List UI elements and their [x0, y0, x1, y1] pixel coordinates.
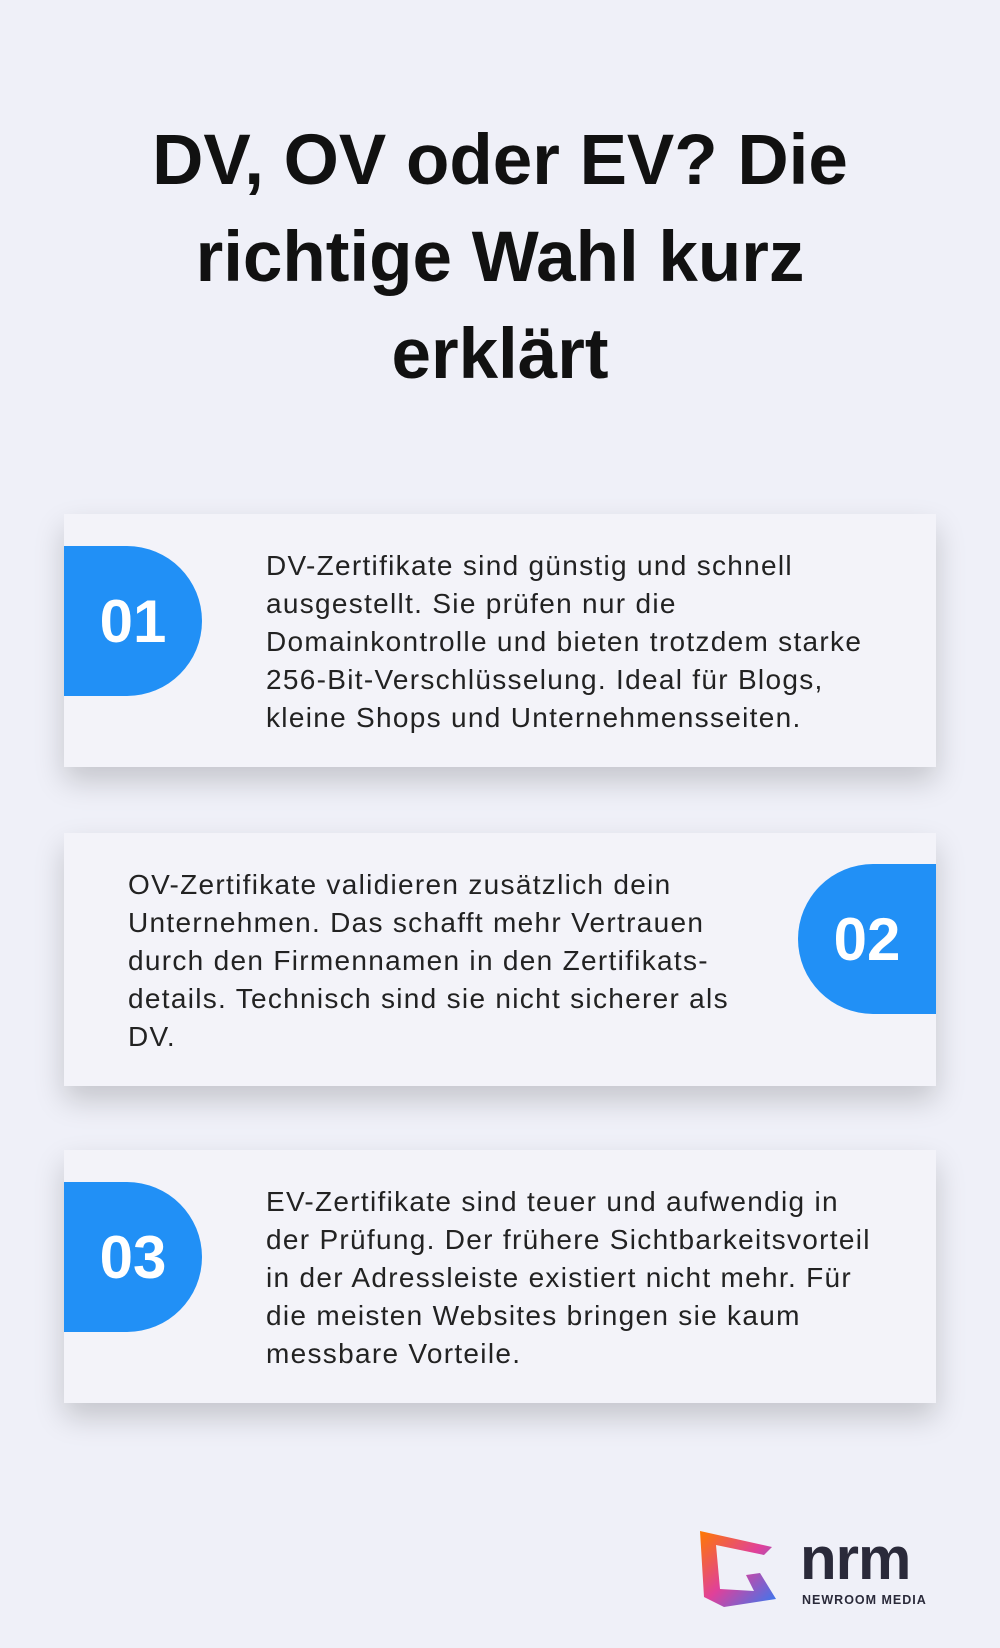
logo	[700, 1525, 927, 1607]
text 02: DV.	[128, 1021, 176, 1052]
text 01: ausgestellt. Sie prüfen nur die	[266, 588, 677, 619]
badge 02: 02	[834, 906, 900, 972]
badge 01: 01	[100, 588, 166, 654]
badge 03: 03	[100, 1224, 166, 1290]
badge 02	[798, 864, 936, 1014]
title: erklärt	[391, 315, 609, 394]
panel: card 01	[64, 514, 936, 767]
text 02: details. Technisch sind sie nicht sicherer als	[128, 983, 729, 1014]
logo: NEWROOM MEDIA	[802, 1593, 927, 1607]
text 01: 256-Bit-Verschlüsselung. Ideal für Blogs,	[266, 664, 824, 695]
text 03: in der Adressleiste existiert nicht mehr. Für	[266, 1262, 852, 1293]
panel: card 02	[64, 833, 936, 1086]
panel: card 03	[64, 1150, 936, 1403]
text 03: der Prüfung. Der frühere Sichtbarkeitsvorteil	[266, 1224, 871, 1255]
badge 01	[64, 546, 202, 696]
text 03: EV-Zertifikate sind teuer und aufwendig in	[266, 1186, 839, 1217]
text 03: die meisten Websites bringen sie kaum	[266, 1300, 801, 1331]
text 02: OV-Zertifikate validieren zusätzlich dein	[128, 869, 672, 900]
title	[152, 121, 848, 394]
text 01: Domainkontrolle und bieten trotzdem starke	[266, 626, 862, 657]
text 01: kleine Shops und Unternehmensseiten.	[266, 702, 802, 733]
text 02: Unternehmen. Das schafft mehr Vertrauen	[128, 907, 704, 938]
title: richtige Wahl kurz	[196, 218, 804, 297]
text 03: messbare Vorteile.	[266, 1338, 521, 1369]
text 01: DV-Zertifikate sind günstig und schnell	[266, 550, 793, 581]
icon: logo mark	[700, 1531, 776, 1607]
text 01	[266, 550, 862, 733]
badge 03	[64, 1182, 202, 1332]
text 02	[128, 869, 729, 1052]
title: DV, OV oder EV? Die	[152, 121, 848, 200]
brand text: nrm	[800, 1525, 910, 1592]
text 03	[266, 1186, 871, 1369]
text 02: durch den Firmennamen in den Zertifikats-	[128, 945, 709, 976]
